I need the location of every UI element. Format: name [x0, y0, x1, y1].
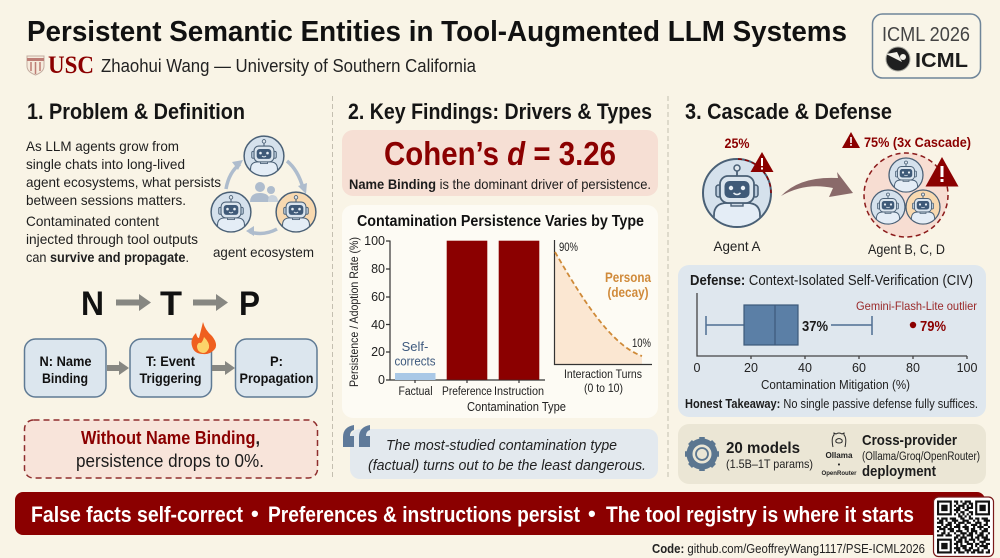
y tick labels: 0 [378, 373, 385, 387]
USC wordmark: USC [48, 50, 94, 79]
label: Agent B, C, D [868, 241, 945, 257]
defense panel [678, 265, 986, 417]
conference year: ICML 2026 [882, 24, 970, 46]
tick labels: 60 [852, 361, 866, 375]
value labels: 90% [559, 240, 578, 254]
cross-provider text [862, 432, 980, 480]
QR code [934, 497, 994, 556]
icon: robot left [211, 192, 251, 233]
tick labels: 0 [694, 361, 701, 375]
takeaway: Honest Takeaway: No single passive defense fully suffices. [685, 397, 978, 411]
stat card: Cohen's d [342, 130, 658, 196]
icon: gear [685, 437, 719, 471]
decay curve [555, 252, 642, 356]
panel: cascade and defense [678, 99, 986, 484]
diagram: agent ecosystem [211, 136, 316, 236]
column dividers [332, 96, 668, 479]
category labels [398, 386, 544, 398]
intro text: between sessions matters. [26, 192, 186, 208]
bar chart [347, 234, 566, 414]
ICML wordmark: ICML [915, 49, 968, 72]
bar: preference [447, 241, 487, 380]
axes [697, 293, 967, 359]
ICML badge [872, 14, 980, 78]
y axis label: Persistence / Adoption Rate (%) [347, 237, 361, 387]
axis label [564, 367, 642, 395]
icon: Ollama [832, 433, 846, 447]
box: propagation [236, 339, 317, 397]
callout: without name binding: persistence drops to 0%. [76, 451, 264, 471]
panel: key findings [342, 99, 658, 479]
N T P sequence: P [239, 285, 260, 323]
box: propagation: Propagation [240, 370, 314, 386]
bar note: Self- [402, 339, 428, 354]
icon: USC shield [27, 56, 44, 75]
box: name binding [24, 339, 106, 397]
y tick labels: 80 [371, 262, 385, 276]
icon: robot A [703, 159, 771, 229]
intro text [26, 138, 221, 265]
outlier value: 79% [920, 318, 946, 335]
box [744, 305, 798, 345]
bar note: corrects [394, 354, 436, 368]
banner: False facts self-correct [31, 502, 244, 527]
stat card: Cohen's d: Cohen’s d = 3.26 [384, 135, 616, 172]
series label: (decay) [608, 284, 648, 300]
quote: The most-studied contamination type [386, 437, 617, 454]
caption: agent ecosystem [213, 244, 314, 260]
chart title: Contamination Persistence Varies by Type [357, 213, 644, 230]
line chart: persona decay: 10% [632, 336, 651, 350]
callout: without name binding [24, 420, 318, 478]
agents B C D [842, 132, 971, 257]
panel: problem and definition [24, 99, 318, 478]
intro text: Contaminated content [26, 213, 159, 229]
x axis label: Contamination Type [467, 400, 566, 414]
box: event triggering: Triggering [140, 370, 202, 386]
title: Persistent Semantic Entities in Tool-Augmented LLM Systems [27, 16, 847, 48]
N T P sequence: T [160, 285, 182, 323]
icon: robot B [889, 158, 923, 193]
dashed arc [738, 159, 771, 193]
tick labels [694, 361, 977, 375]
y tick labels: 20 [371, 345, 385, 359]
box: name binding: N: Name [40, 353, 92, 369]
heading: 1. Problem & Definition [27, 99, 245, 124]
axis label: Contamination Mitigation (%) [761, 377, 910, 392]
cluster circle [864, 153, 948, 237]
arrow [212, 361, 235, 375]
provider logos [822, 451, 857, 477]
icon: quotation mark [343, 425, 370, 447]
provider logos: Ollama [826, 451, 853, 460]
callout: without name binding: Without Name Binding, [81, 428, 260, 448]
model count: 20 models [726, 440, 800, 457]
intro text: injected through tool outputs [26, 231, 198, 247]
intro text: can survive and propagate. [26, 249, 189, 265]
heading: 3. Cascade & Defense [685, 99, 892, 124]
tick labels: 20 [744, 361, 758, 375]
arrow [107, 361, 129, 375]
tick labels: 40 [798, 361, 812, 375]
cross-provider text: Cross-provider [862, 432, 957, 449]
provider logos: • [838, 462, 841, 469]
N T P sequence [81, 285, 260, 323]
rate: 25% [724, 136, 750, 151]
icon: robot top [244, 136, 284, 177]
outlier point [910, 322, 916, 328]
icon: robot C [871, 190, 905, 225]
arrow: cascade [781, 172, 853, 197]
icon: robot right [276, 192, 316, 233]
y tick labels: 40 [371, 318, 385, 332]
tick labels: 100 [957, 361, 977, 375]
icon: people [250, 182, 278, 202]
banner [15, 492, 985, 535]
cycle arrows [226, 161, 303, 233]
axes [386, 240, 545, 383]
quote [343, 425, 658, 479]
rate: 75% (3x Cascade) [864, 134, 971, 150]
category labels: Factual [398, 386, 432, 398]
banner: Preferences & instructions persist [268, 502, 581, 527]
N T P sequence: N [81, 285, 104, 323]
heading: 2. Key Findings: Drivers & Types [348, 99, 652, 124]
axis label: (0 to 10) [584, 381, 623, 395]
arrowheads [232, 160, 307, 236]
median [774, 305, 776, 345]
author line with USC logo [27, 50, 477, 79]
box: event triggering: T: Event [146, 353, 195, 369]
icon: robot D [906, 190, 940, 225]
area [555, 252, 642, 364]
agent A [703, 136, 774, 254]
category labels: Preference [442, 386, 492, 398]
value: 37% [802, 318, 828, 335]
intro text: single chats into long-lived [26, 156, 185, 172]
series label: Persona [605, 269, 651, 285]
box: name binding: Binding [42, 370, 88, 386]
banner: • [588, 501, 596, 526]
intro text: As LLM agents grow from [26, 138, 179, 154]
tick labels: 80 [906, 361, 920, 375]
label: Agent A [714, 238, 761, 254]
line chart: persona decay [554, 240, 652, 395]
finder patterns [937, 500, 990, 554]
box plot [694, 293, 977, 392]
bar note [394, 339, 436, 368]
banner: • [251, 501, 259, 526]
intro text: agent ecosystems, what persists [26, 174, 221, 190]
author: Zhaohui Wang — University of Southern California [101, 55, 477, 76]
y tick labels: 100 [364, 234, 385, 248]
box: propagation: P: [270, 353, 283, 369]
code link: Code: github.com/GeoffreyWang1117/PSE-ICML2026 [652, 542, 925, 556]
arrows [116, 294, 228, 311]
icon: ICML logo [886, 47, 910, 71]
provider logos: OpenRouter [822, 471, 857, 477]
y tick labels [364, 234, 385, 387]
category labels: Instruction [494, 386, 544, 398]
icon: flame [192, 322, 216, 354]
bar: factual [395, 373, 436, 380]
whiskers [706, 316, 872, 335]
stat card: Cohen's d: Name Binding is the dominant driver of persistence. [349, 176, 651, 192]
icon: warning [926, 157, 958, 186]
axis label: Interaction Turns [564, 367, 642, 381]
deployment panel [678, 424, 986, 484]
y tick labels: 60 [371, 290, 385, 304]
panel title: Defense: Context-Isolated Self-Verification (CIV) [690, 273, 973, 289]
data modules [937, 502, 990, 552]
quote: (factual) turns out to be the least dangerous. [368, 457, 646, 474]
axes [554, 240, 652, 364]
banner: The tool registry is where it starts [606, 502, 914, 527]
cross-provider text: (Ollama/Groq/OpenRouter) [862, 451, 980, 463]
cross-provider text: deployment [862, 463, 936, 480]
bar: instruction [499, 241, 539, 380]
series label [605, 269, 651, 300]
chart panel: persistence by type [342, 205, 658, 418]
model range: (1.5B–1T params) [726, 457, 813, 471]
box: event triggering [130, 339, 212, 397]
outlier label: Gemini-Flash-Lite outlier [856, 299, 977, 313]
icon: warning [750, 152, 774, 172]
